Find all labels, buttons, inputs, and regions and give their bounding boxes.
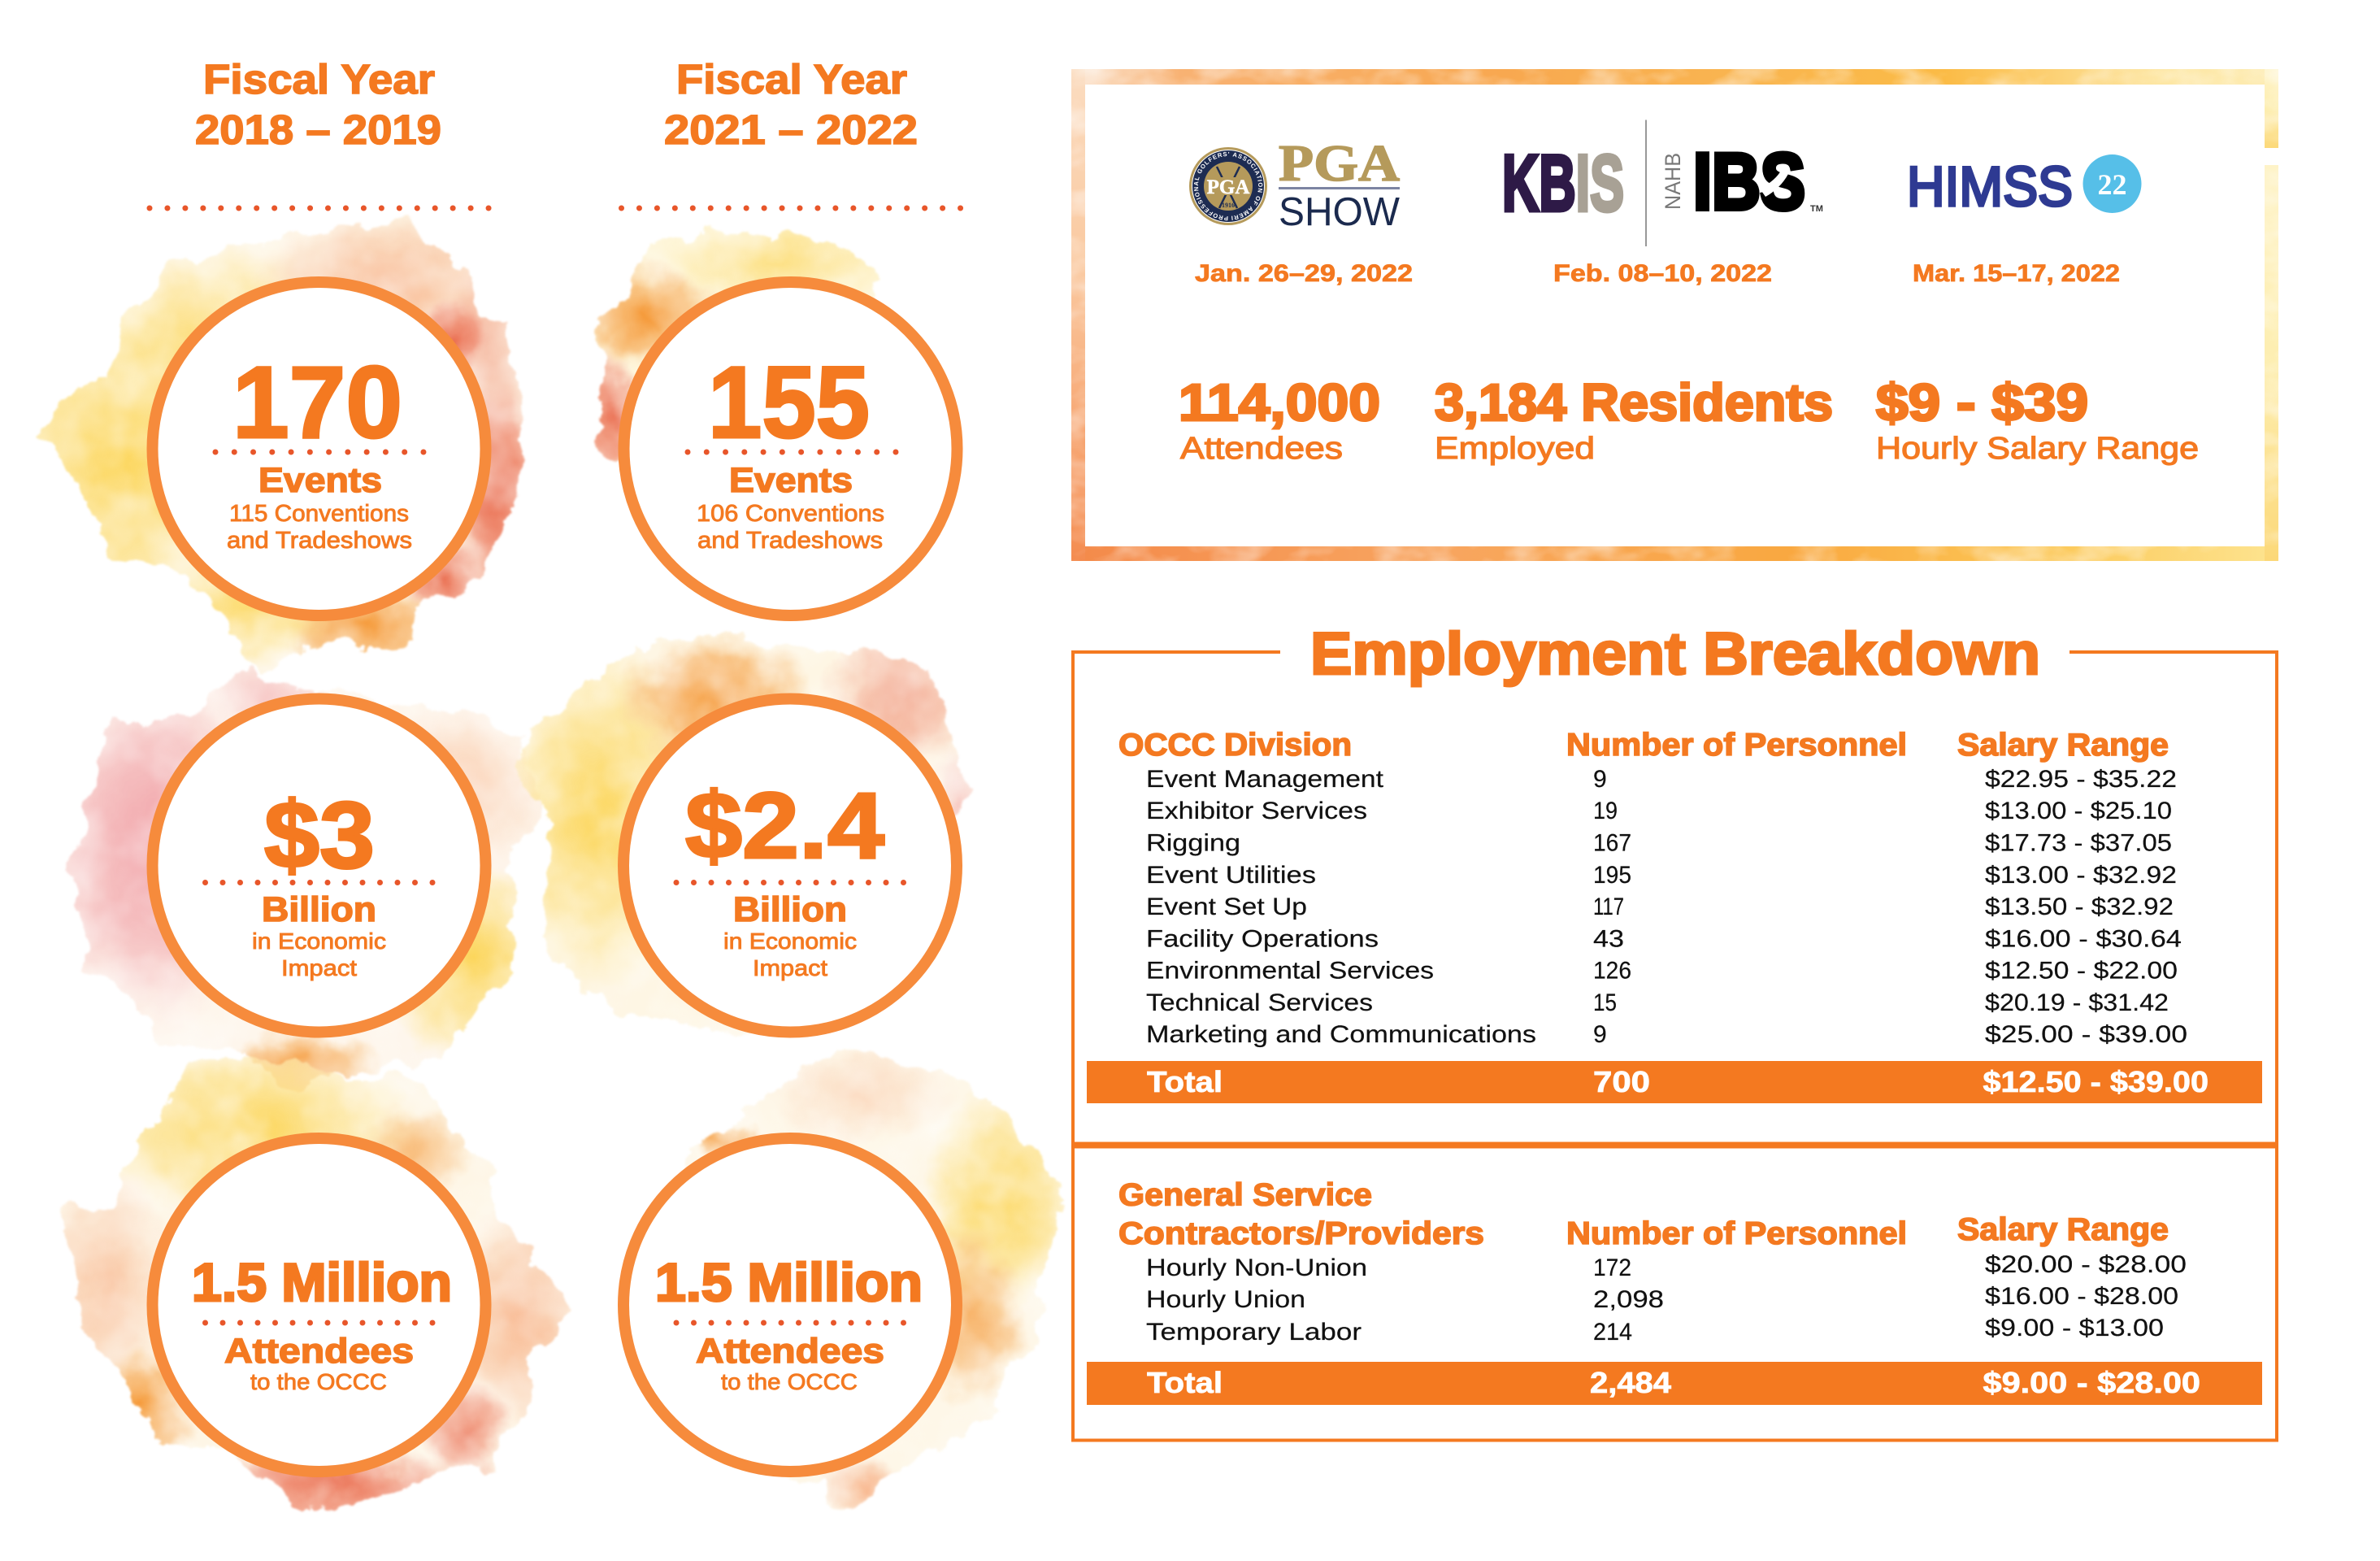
stat circle: 1.5 million attendees 2018-2019: [153, 1138, 486, 1472]
stat circle: $2.4 billion: Impact: [753, 955, 827, 981]
row: rigging: 167: [1593, 829, 1631, 857]
row: facility operations: $16.00 - $30.64: [1985, 925, 2182, 953]
row: environmental services: $12.50 - $22.00: [1985, 958, 2178, 984]
dotted rule: column 1: [150, 205, 489, 211]
stat: residents employed: 3,184 Residents: [1435, 373, 1833, 432]
row: event set up: [1146, 894, 2174, 920]
logo: PGA Show: PGA: [1207, 176, 1249, 198]
column headers: Salary Range: [1957, 1212, 2169, 1247]
stat circle: 155 events: 106 Conventions: [697, 501, 884, 527]
heading: fiscal year 2018-2019: 2018 – 2019: [195, 107, 441, 153]
row: temporary labor: [1146, 1315, 2164, 1346]
row: temporary labor: Temporary Labor: [1146, 1319, 1362, 1346]
stat circle: 1.5 million attendees 2018-2019: 1.5 Million: [192, 1252, 452, 1312]
logo: NAHB IBS: NAHB: [1661, 153, 1685, 210]
stat circle: 1.5 million attendees 2021-2022: 1.5 Million: [655, 1252, 923, 1312]
total row: $12.50 - $39.00: [1983, 1065, 2208, 1098]
stat circle: 1.5 million attendees 2021-2022: [623, 1138, 957, 1472]
row: temporary labor: $9.00 - $13.00: [1985, 1315, 2164, 1341]
stat: residents employed: Employed: [1435, 432, 1595, 466]
watercolor frame: [1071, 69, 2278, 561]
row: exhibitor services: 19: [1593, 798, 1618, 824]
date: PGA Show: Jan. 26–29, 2022: [1195, 260, 1413, 287]
row: exhibitor services: $13.00 - $25.10: [1985, 798, 2172, 824]
heading: fiscal year 2021-2022: 2021 – 2022: [664, 107, 918, 153]
watercolor splash: 2018-2019 attendees: [60, 1055, 572, 1512]
row: event set up: Event Set Up: [1146, 894, 1307, 920]
row: temporary labor: 214: [1593, 1319, 1632, 1346]
date: KBIS / IBS: Feb. 08–10, 2022: [1553, 260, 1772, 287]
stat circle: 170 events: Events: [258, 461, 382, 500]
row: facility operations: 43: [1593, 925, 1624, 953]
stat circle: 170 events: 170: [232, 346, 402, 459]
divider between logos: [1645, 120, 1647, 246]
row: hourly non-union: $20.00 - $28.00: [1985, 1251, 2187, 1278]
total row: Total: [1147, 1065, 1223, 1098]
logo: KBIS: KBIS: [1502, 138, 1624, 228]
column headers: Number of Personnel: [1566, 1216, 1907, 1251]
row: event management: $22.95 - $35.22: [1985, 766, 2177, 793]
watercolor splash: 2018-2019 events: [36, 215, 527, 675]
panel outline: [1073, 652, 2277, 1441]
panel: trade shows: [1071, 69, 2278, 561]
row: event set up: $13.50 - $32.92: [1985, 894, 2174, 920]
stat: attendees: Attendees: [1180, 432, 1343, 466]
stat circle: 155 events: Events: [729, 461, 853, 500]
row: environmental services: 126: [1593, 958, 1631, 984]
stat circle: $3 billion: [153, 699, 486, 1033]
row: marketing and communications: 9: [1593, 1021, 1607, 1048]
total row: $9.00 - $28.00: [1983, 1366, 2200, 1399]
logo: NAHB IBS: IBS: [1693, 137, 1805, 226]
watercolor splash: 2021-2022 attendees: [684, 1049, 1065, 1511]
row: environmental services: Environmental Services: [1146, 958, 1434, 984]
row: rigging: Rigging: [1146, 829, 1240, 857]
date: HIMSS: Mar. 15–17, 2022: [1913, 260, 2120, 287]
stat circle: 170 events: and Tradeshows: [227, 528, 412, 554]
column headers: Number of Personnel: [1566, 728, 1907, 763]
stat: residents employed: [1435, 373, 1833, 466]
row: marketing and communications: [1146, 1021, 2187, 1048]
row: event management: 9: [1593, 766, 1607, 793]
stat circle: $3 billion: Billion: [262, 890, 376, 929]
row: hourly union: [1146, 1283, 2178, 1313]
stat circle: 1.5 million attendees 2018-2019: Attendees: [224, 1332, 414, 1371]
row: hourly non-union: Hourly Non-Union: [1146, 1254, 1367, 1281]
stat: hourly salary range: Hourly Salary Range: [1876, 432, 2199, 466]
row: marketing and communications: Marketing and Communications: [1146, 1021, 1536, 1048]
row: hourly non-union: 172: [1593, 1254, 1631, 1281]
total row: [1087, 1362, 2262, 1405]
stat circle: 170 events: 115 Conventions: [229, 501, 409, 527]
logo: HIMSS22: 22: [2097, 168, 2126, 201]
logo: HIMSS22: HIMSS: [1907, 155, 2073, 218]
heading: employment breakdown: Employment Breakdown: [1310, 621, 2040, 687]
column headers: Salary Range: [1957, 728, 2169, 763]
row: event management: Event Management: [1146, 766, 1384, 793]
row: event utilities: 195: [1593, 862, 1631, 889]
column headers: [1118, 1177, 2169, 1251]
row: event management: [1146, 766, 2177, 793]
total row: Total: [1147, 1366, 1223, 1399]
row: event utilities: Event Utilities: [1146, 862, 1316, 889]
table: OCCC division: [1087, 728, 2262, 1103]
stat circle: 1.5 million attendees 2018-2019: to the OCCC: [250, 1369, 387, 1394]
panel: employment breakdown: [1071, 621, 2278, 1441]
row: rigging: [1146, 829, 2172, 857]
stat circle: 155 events: and Tradeshows: [697, 528, 883, 554]
watercolor splash: 2018-2019 impact: [65, 665, 543, 1093]
row: environmental services: [1146, 958, 2178, 984]
row: hourly non-union: [1146, 1251, 2187, 1281]
column headers: OCCC Division: [1118, 728, 1352, 763]
total row: [1087, 1061, 2262, 1103]
column headers: Contractors/Providers: [1118, 1216, 1484, 1251]
stat circle: 155 events: [624, 282, 958, 615]
stat circle: $2.4 billion: in Economic: [723, 928, 857, 954]
row: rigging: $17.73 - $37.05: [1985, 829, 2172, 857]
stat circle: $3 billion: in Economic: [252, 928, 386, 954]
stat circle: 1.5 million attendees 2021-2022: Attendees: [696, 1332, 884, 1371]
row: facility operations: [1146, 925, 2182, 953]
stat circle: 170 events: [153, 282, 486, 615]
row: facility operations: Facility Operations: [1146, 925, 1379, 953]
stat: attendees: [1179, 373, 1380, 466]
row: marketing and communications: $25.00 - $39.00: [1985, 1021, 2187, 1048]
stat circle: 1.5 million attendees 2021-2022: to the OCCC: [721, 1369, 858, 1394]
stat circle: $3 billion: Impact: [281, 955, 357, 981]
row: technical services: $20.19 - $31.42: [1985, 989, 2169, 1016]
stat: attendees: 114,000: [1179, 373, 1380, 432]
heading: fiscal year 2018-2019: [195, 56, 441, 153]
logo: PGA Show: PROFESSIONAL GOLFERS' ASSOCIATION OF AMERICA: [1193, 151, 1263, 221]
logo: PGA Show: 1916: [1222, 202, 1235, 209]
row: event set up: 117: [1593, 894, 1624, 920]
stat circle: $3 billion: $3: [264, 782, 375, 888]
row: exhibitor services: Exhibitor Services: [1146, 798, 1367, 824]
heading: fiscal year 2021-2022: [664, 56, 918, 153]
stat circle: 155 events: 155: [708, 346, 870, 459]
row: hourly union: 2,098: [1593, 1286, 1664, 1313]
logo: PGA Show: [1189, 134, 1401, 234]
heading: fiscal year 2018-2019: Fiscal Year: [203, 56, 435, 102]
stat circle: $2.4 billion: $2.4: [685, 774, 884, 878]
watercolor splash: 2021-2022 events: [593, 224, 881, 463]
stat circle: $2.4 billion: Billion: [733, 890, 847, 929]
logo: NAHB IBS: TM: [1810, 204, 1823, 214]
watercolor splash: 2021-2022 impact: [515, 631, 974, 1037]
total row: 2,484: [1590, 1366, 1671, 1399]
row: technical services: 15: [1593, 989, 1617, 1016]
heading: fiscal year 2021-2022: Fiscal Year: [676, 56, 907, 102]
row: hourly union: Hourly Union: [1146, 1286, 1305, 1313]
column headers: General Service: [1118, 1177, 1372, 1213]
table: general service contractors: [1087, 1177, 2262, 1405]
row: exhibitor services: [1146, 798, 2172, 824]
dotted rule: column 2: [621, 205, 961, 211]
row: event utilities: $13.00 - $32.92: [1985, 862, 2177, 889]
stat: hourly salary range: $9 - $39: [1876, 373, 2088, 432]
row: hourly union: $16.00 - $28.00: [1985, 1283, 2178, 1310]
stat: hourly salary range: [1876, 373, 2199, 466]
total row: 700: [1593, 1065, 1650, 1098]
logo: PGA Show: PGA: [1279, 134, 1400, 192]
column headers: [1118, 728, 2169, 763]
section divider: [1071, 1141, 2278, 1148]
row: event utilities: [1146, 862, 2177, 889]
row: technical services: [1146, 989, 2169, 1016]
stat circle: $2.4 billion: [623, 699, 957, 1033]
logo: PGA Show: SHOW: [1279, 190, 1401, 234]
row: technical services: Technical Services: [1146, 989, 1373, 1016]
